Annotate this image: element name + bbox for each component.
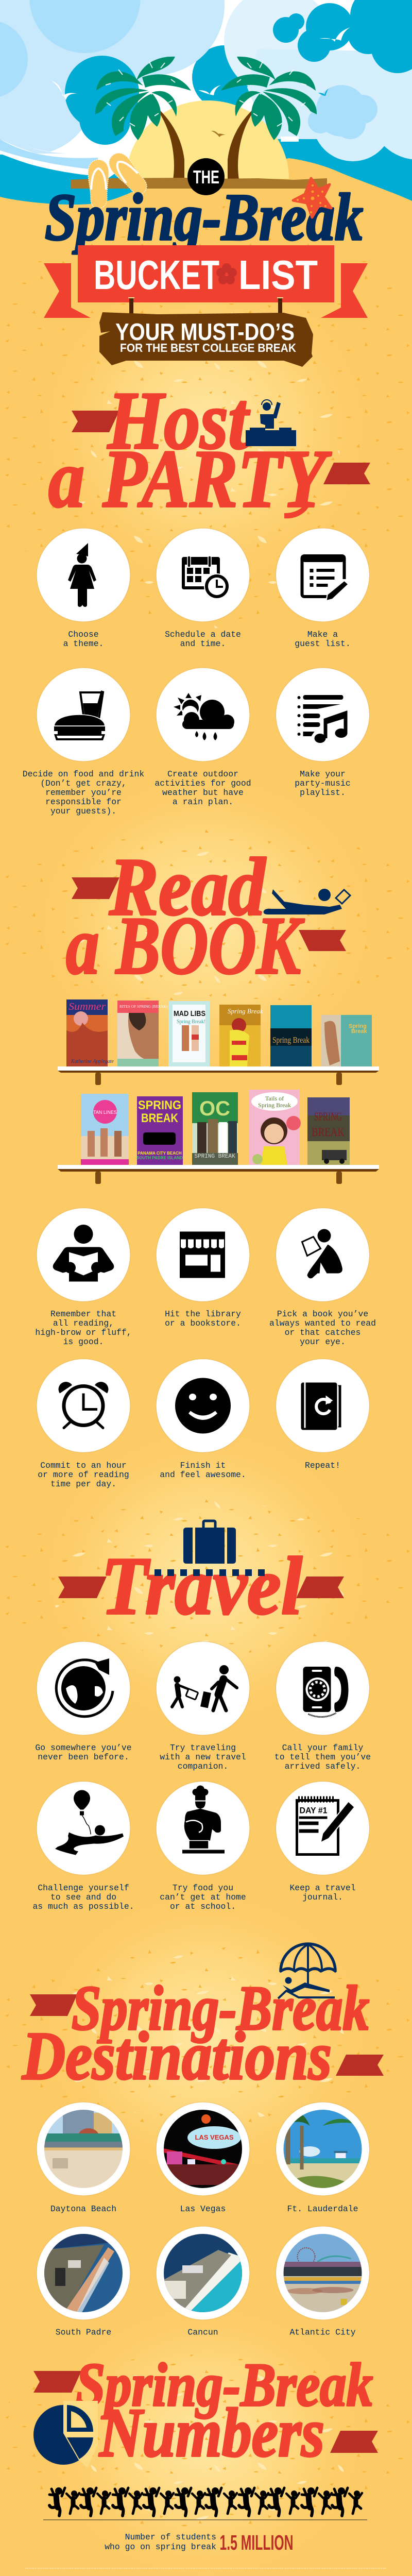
shelf (58, 1165, 379, 1184)
step: repeat: Repeat! (305, 1461, 340, 1470)
step: outdoor activities: Create outdoor (167, 769, 238, 779)
icon: pie chart (33, 2401, 98, 2468)
panel: reading steps (35, 1208, 376, 1489)
wood sign: your must-do's: YOUR MUST-DO’S (115, 318, 295, 345)
header sun (126, 100, 289, 179)
step: pick a book: Pick a book you’ve (277, 1309, 368, 1319)
heading: Host a Party: Host (107, 375, 250, 466)
step: go somewhere new (35, 1641, 132, 1762)
section glows (31, 263, 381, 2576)
bookshelf 1 (58, 999, 379, 1085)
heading: Host a Party: a PARTY (48, 433, 332, 524)
book: The OC: SPRING BREAK (194, 1154, 235, 1160)
badge: THE (187, 158, 225, 195)
heading: Read a Book (66, 841, 346, 991)
book: Spring Break teal (270, 1005, 312, 1066)
step: travel companion: Try traveling (170, 1743, 236, 1753)
destination: Ft. Lauderdale: Ft. Lauderdale (287, 2204, 358, 2214)
stat: 1.5 million students: 1.5 MILLION (219, 2531, 294, 2554)
heading: Spring-Break Destinations: Destinations (22, 2018, 332, 2094)
step: all reading is good (35, 1208, 132, 1347)
destination: South Padre: South Padre (56, 2328, 111, 2337)
heading: Read a Book: a BOOK (66, 900, 304, 991)
step: playlist (276, 668, 370, 798)
step: go somewhere new: Go somewhere you’ve (35, 1743, 132, 1753)
step: food and drink (23, 668, 144, 816)
step: schedule a date: and time. (180, 639, 226, 649)
destination: Atlantic City (276, 2226, 370, 2337)
panel: travel steps (32, 1641, 371, 1911)
sign hangers (128, 297, 283, 317)
panel: destinations (36, 2102, 370, 2337)
step: challenge yourself: Challenge yourself (38, 1883, 129, 1893)
book: Spring Break guide: SOUTH PADRE ISLAND (136, 1156, 183, 1160)
book: Spring Break yellow: Spring Break (228, 1007, 263, 1015)
book: Mad Libs: MAD LIBS (174, 1009, 205, 1018)
heading: Spring-Break Numbers (33, 2350, 378, 2471)
step: repeat (276, 1359, 370, 1470)
book: Spring Break jeep: BREAK (312, 1126, 345, 1139)
step: food and drink: responsible for (45, 797, 122, 807)
main title: Spring-Break: Spring-Break (45, 180, 363, 255)
book: Spring Break guide: SPRING (138, 1098, 181, 1112)
step: commit an hour (36, 1359, 131, 1489)
step: guest list: Make a (307, 630, 338, 639)
stat: 1.5 million students (105, 2531, 294, 2554)
step: commit an hour: time per day. (50, 1479, 116, 1489)
ribbon banner: bucket list (44, 245, 368, 318)
book: calendar: Break (351, 1028, 367, 1035)
step: pick a book: always wanted to read (269, 1318, 376, 1328)
book: Spring Break jeep: SPRING (314, 1110, 342, 1123)
step: challenge yourself: as much as possible. (32, 1902, 134, 1911)
book: Mad Libs (168, 1001, 210, 1066)
destination: Atlantic City: Atlantic City (289, 2328, 356, 2337)
destination: South Padre (36, 2226, 131, 2337)
book: Tails of Spring Break (249, 1090, 301, 1165)
icon: beach umbrella (278, 1944, 335, 1998)
step: pick a book: your eye. (300, 1337, 346, 1347)
step: try food: or at school. (170, 1902, 236, 1911)
step: pick a book (269, 1208, 376, 1347)
destination: Ft. Lauderdale (276, 2102, 370, 2214)
step: all reading is good: Remember that (50, 1309, 116, 1319)
icon: person reading on stomach (264, 889, 350, 914)
step: all reading is good: is good. (63, 1337, 104, 1347)
book: Spring Break guide: PANAMA CITY BEACH (138, 1151, 182, 1156)
step: library or bookstore: Hit the library (165, 1309, 241, 1319)
step: travel journal (276, 1781, 370, 1902)
step: call family: Call your family (282, 1743, 363, 1753)
destination: Daytona Beach: Daytona Beach (50, 2204, 116, 2214)
book: Spring Break jeep (307, 1097, 350, 1165)
palm trees (95, 57, 317, 179)
heading: Read a Book: Read (109, 841, 266, 933)
panel: party steps (23, 528, 370, 816)
badge: THE: THE (193, 166, 219, 188)
destination: Daytona Beach (36, 2102, 131, 2214)
book: calendar (321, 1015, 372, 1066)
step: travel companion (156, 1641, 250, 1771)
heading: Host a Party (48, 375, 370, 524)
book: The OC (192, 1092, 238, 1165)
header sky with clouds and water (0, 0, 412, 206)
step: call family: to tell them you’ve (274, 1752, 371, 1762)
step: outdoor activities: a rain plan. (173, 797, 233, 807)
stat: 1.5 million students: Number of students (125, 2532, 216, 2542)
icon: flip-flops (88, 149, 151, 208)
stat: 1.5 million students: who go on spring break (105, 2542, 216, 2552)
step: travel journal: DAY #1 (300, 1805, 328, 1816)
step: all reading is good: high-brow or fluff, (35, 1328, 132, 1337)
step: go somewhere new: never been before. (38, 1752, 129, 1762)
step: food and drink: remember you’re (45, 788, 122, 798)
step: playlist: playlist. (300, 788, 346, 798)
step: food and drink: Decide on food and drink (23, 769, 144, 779)
heading: Spring-Break Numbers: Numbers (98, 2395, 324, 2471)
wood sign: your must-do's: FOR THE BEST COLLEGE BREAK (120, 341, 296, 354)
bookshelf 2 (58, 1090, 379, 1184)
book: Tan Lines (81, 1094, 129, 1165)
wood sign: your must-do's (99, 312, 313, 367)
book: Mad Libs: Spring Break! (177, 1019, 205, 1025)
step: call family (274, 1641, 371, 1771)
book: Tails of Spring Break: Spring Break (258, 1101, 291, 1109)
step: schedule a date: Schedule a date (165, 630, 241, 639)
step: choose a theme: Choose (68, 630, 99, 639)
book: Tan Lines: TAN LINES (93, 1110, 117, 1115)
step: pick a book: or that catches (285, 1328, 360, 1337)
step: choose a theme (36, 528, 131, 649)
ribbon banner: bucket list: LIST (238, 252, 318, 298)
step: finish it: Finish it (180, 1461, 226, 1470)
step: playlist: party-music (295, 778, 351, 788)
icon: DJ (246, 400, 296, 446)
book: Rites of Spring Break (117, 1001, 168, 1066)
step: travel journal: journal. (302, 1892, 343, 1902)
destination: Las Vegas (156, 2102, 250, 2214)
ribbon banner: bucket list: BUCKET (94, 252, 219, 298)
step: guest list: guest list. (295, 639, 351, 649)
step: guest list (276, 528, 370, 649)
step: food and drink: your guests). (50, 806, 116, 816)
step: commit an hour: or more of reading (38, 1470, 129, 1480)
step: outdoor activities (154, 668, 251, 807)
book: calendar: Spring (349, 1023, 367, 1029)
book: Tails of Spring Break: Tails of (265, 1095, 284, 1102)
book: Summer (66, 999, 114, 1066)
icon: starfish (293, 178, 331, 217)
step: travel journal: Keep a travel (289, 1883, 356, 1893)
step: outdoor activities: weather but have (162, 788, 244, 798)
step: choose a theme: a theme. (63, 639, 104, 649)
step: try food: Try food you (173, 1883, 233, 1893)
destination: Las Vegas: LAS VEGAS (195, 2133, 234, 2141)
step: all reading is good: all reading, (53, 1318, 114, 1328)
step: try food: can’t get at home (160, 1892, 246, 1902)
step: food and drink: (Don’t get crazy, (40, 778, 127, 788)
step: library or bookstore (156, 1208, 250, 1328)
step: finish it: and feel awesome. (160, 1470, 246, 1480)
step: travel companion: with a new travel (160, 1752, 246, 1762)
book: Rites of Spring Break: RITES OF SPRING (BREAK) (119, 1004, 168, 1009)
step: commit an hour: Commit to an hour (40, 1461, 127, 1470)
book: The OC: OC (199, 1097, 230, 1120)
step: finish it (156, 1359, 250, 1480)
book: Spring Break guide (136, 1096, 183, 1165)
ground strip (71, 178, 327, 189)
heading: Spring-Break Destinations (22, 1973, 384, 2094)
step: challenge yourself (32, 1781, 134, 1911)
book: Spring Break teal: Spring Break (272, 1035, 310, 1045)
stat: students pictogram (43, 2487, 367, 2520)
book: Spring Break yellow (219, 1005, 263, 1066)
step: library or bookstore: or a bookstore. (165, 1318, 241, 1328)
book: Spring Break guide: BREAK (141, 1111, 179, 1125)
sand hill (0, 158, 412, 515)
shelf (58, 1066, 379, 1085)
destination: Cancun: Cancun (187, 2328, 218, 2337)
book: Summer: Summer (68, 1001, 106, 1012)
book: Summer: Katherine Applegate (71, 1059, 114, 1064)
step: try food (156, 1781, 250, 1911)
heading: Travel: Travel (101, 1540, 303, 1632)
icon: suitcase with dotted trail (154, 1521, 265, 1576)
destination: Las Vegas: Las Vegas (180, 2204, 226, 2214)
step: challenge yourself: to see and do (50, 1892, 116, 1902)
step: outdoor activities: activities for good (154, 778, 251, 788)
step: playlist: Make your (300, 769, 346, 779)
step: call family: arrived safely. (285, 1761, 360, 1771)
step: schedule a date (156, 528, 250, 649)
destination: Cancun (156, 2226, 250, 2337)
step: travel companion: companion. (178, 1761, 228, 1771)
